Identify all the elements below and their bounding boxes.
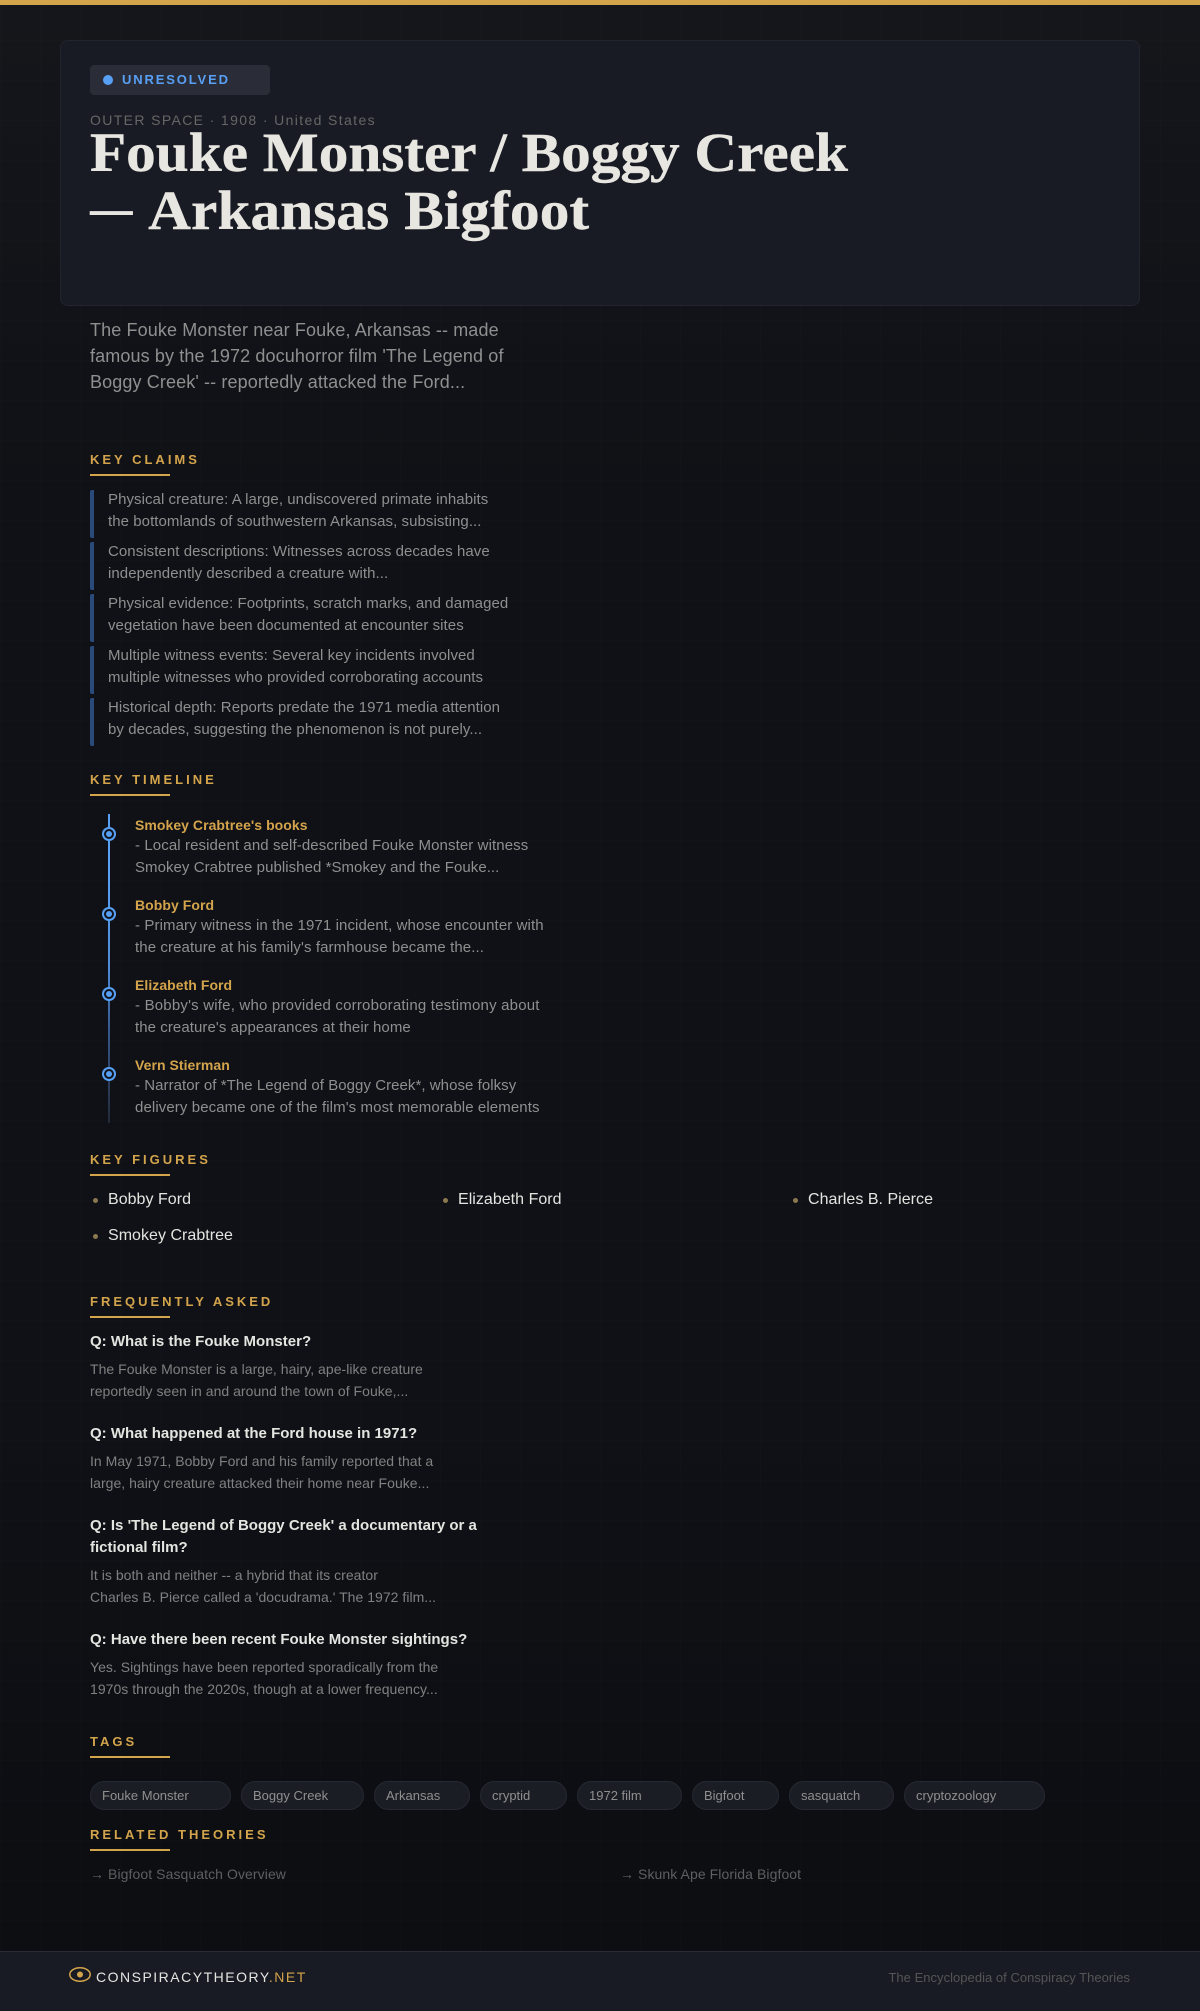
timeline event 2 <box>135 897 544 956</box>
panel: hero header <box>60 40 1140 306</box>
faq answer 1: The Fouke Monster is a large, hairy, ape-like creature <box>90 1361 423 1377</box>
claim 2: independently described a creature with... <box>108 564 388 582</box>
faq answer 2: large, hairy creature attacked their home near Fouke... <box>90 1475 429 1491</box>
figure: Smokey Crabtree: Smokey Crabtree <box>108 1227 233 1244</box>
tag pill: Bigfoot <box>692 1781 779 1810</box>
title: — <box>90 177 133 238</box>
intro summary <box>90 320 504 392</box>
timeline event 1 <box>135 817 528 876</box>
timeline event 3: the creature's appearances at their home <box>135 1019 411 1036</box>
timeline node 4 <box>102 1067 116 1081</box>
timeline spine <box>108 814 110 1123</box>
heading: key timeline: KEY TIMELINE <box>90 772 217 787</box>
faq question 3: fictional film? <box>90 1539 188 1556</box>
figure: Elizabeth Ford: Elizabeth Ford <box>458 1191 562 1208</box>
heading: tags: TAGS <box>90 1734 137 1749</box>
claim 1: the bottomlands of southwestern Arkansas, subsisting... <box>108 512 482 530</box>
claim 2 <box>90 542 550 590</box>
title: Fouke Monster / Boggy Creek <box>90 122 848 183</box>
timeline node 2 <box>102 907 116 921</box>
badge label: UNRESOLVED <box>122 72 230 87</box>
figure: Bobby Ford: Bobby Ford <box>108 1191 191 1208</box>
claim 1 <box>90 490 550 538</box>
claim 3 <box>90 594 550 642</box>
heading: key figures: KEY FIGURES <box>90 1152 211 1167</box>
faq answer 4: Yes. Sightings have been reported sporadically from the <box>90 1659 438 1675</box>
timeline event 3: Elizabeth Ford <box>135 977 232 993</box>
claim 1: Physical creature: A large, undiscovered primate inhabits <box>108 490 488 508</box>
claim 4: Multiple witness events: Several key incidents involved <box>108 646 475 664</box>
claim 3: Physical evidence: Footprints, scratch marks, and damaged <box>108 594 508 612</box>
claim 5 <box>90 698 550 746</box>
tag pill: sasquatch <box>789 1781 894 1810</box>
timeline event 1: Smokey Crabtree's books <box>135 817 308 833</box>
faq question 1: Q: What is the Fouke Monster? <box>90 1333 311 1350</box>
tag pill: Boggy Creek <box>241 1781 364 1810</box>
claim 2: Consistent descriptions: Witnesses across decades have <box>108 542 490 560</box>
icon: eye logo <box>69 1967 91 1982</box>
timeline event 4 <box>135 1057 540 1116</box>
faq question 4: Q: Have there been recent Fouke Monster sightings? <box>90 1631 467 1648</box>
heading: frequently asked: FREQUENTLY ASKED <box>90 1294 273 1309</box>
title <box>90 122 848 242</box>
faq answer 2 <box>90 1453 434 1491</box>
tag pill: cryptid: cryptid <box>492 1788 530 1803</box>
claim 4 <box>90 646 550 694</box>
timeline event 2: Bobby Ford <box>135 897 214 913</box>
timeline event 4: - Narrator of *The Legend of Boggy Creek*, whose folksy <box>135 1077 516 1094</box>
faq answer 4: 1970s through the 2020s, though at a lower frequency... <box>90 1681 438 1697</box>
faq question 2: Q: What happened at the Ford house in 1971? <box>90 1425 417 1442</box>
timeline event 1: - Local resident and self-described Fouke Monster witness <box>135 837 528 854</box>
timeline <box>108 814 110 1123</box>
heading: key claims: KEY CLAIMS <box>90 452 200 467</box>
faq question 3: Q: Is 'The Legend of Boggy Creek' a documentary or a <box>90 1517 477 1534</box>
tag pill: 1972 film <box>577 1781 682 1810</box>
timeline node 3 <box>102 987 116 1001</box>
claim 3: vegetation have been documented at encounter sites <box>108 616 464 634</box>
panel: footer <box>0 1951 1200 2011</box>
intro summary: The Fouke Monster near Fouke, Arkansas -- made <box>90 320 499 340</box>
footer tagline: The Encyclopedia of Conspiracy Theories <box>888 1970 1130 1985</box>
claim 5: by decades, suggesting the phenomenon is not purely... <box>108 720 482 738</box>
tag pill: cryptid <box>480 1781 567 1810</box>
timeline node 1 <box>102 827 116 841</box>
tag pill: Boggy Creek: Boggy Creek <box>253 1788 328 1803</box>
faq answer 1 <box>90 1361 423 1399</box>
faq answer 1: reportedly seen in and around the town of Fouke,... <box>90 1383 408 1399</box>
timeline event 4: Vern Stierman <box>135 1057 230 1073</box>
related link: Bigfoot Sasquatch Overview: → Bigfoot Sasquatch Overview <box>90 1866 286 1882</box>
footer logo text: CONSPIRACYTHEORY.NET <box>96 1969 307 1985</box>
timeline event 1: Smokey Crabtree published *Smokey and the Fouke... <box>135 859 499 876</box>
timeline event 2: - Primary witness in the 1971 incident, whose encounter with <box>135 917 544 934</box>
tag pill: Arkansas <box>374 1781 470 1810</box>
heading: related theories: RELATED THEORIES <box>90 1827 268 1842</box>
figure: Charles B. Pierce: Charles B. Pierce <box>808 1191 933 1208</box>
claim 5: Historical depth: Reports predate the 1971 media attention <box>108 698 500 716</box>
tag pill: cryptozoology: cryptozoology <box>916 1788 996 1803</box>
tag pill: Fouke Monster <box>90 1781 231 1810</box>
faq answer 3: It is both and neither -- a hybrid that its creator <box>90 1567 378 1583</box>
intro summary: Boggy Creek' -- reportedly attacked the Ford... <box>90 372 465 392</box>
faq answer 2: In May 1971, Bobby Ford and his family reported that a <box>90 1453 433 1469</box>
claim 4: multiple witnesses who provided corroborating accounts <box>108 668 483 686</box>
faq question 3 <box>90 1517 477 1556</box>
timeline event 3: - Bobby's wife, who provided corroborating testimony about <box>135 997 540 1014</box>
timeline event 2: the creature at his family's farmhouse became the... <box>135 939 484 956</box>
tag pill: cryptozoology <box>904 1781 1045 1810</box>
tag pill: Bigfoot: Bigfoot <box>704 1788 744 1803</box>
status badge <box>90 65 270 95</box>
intro summary: famous by the 1972 docuhorror film 'The Legend of <box>90 346 504 366</box>
tag pill: Arkansas: Arkansas <box>386 1788 440 1803</box>
title: Arkansas Bigfoot <box>148 180 589 241</box>
top accent bar <box>0 0 1200 5</box>
timeline event 4: delivery became one of the film's most memorable elements <box>135 1099 540 1116</box>
category meta line: OUTER SPACE · 1908 · United States <box>90 112 376 128</box>
tag pill: 1972 film: 1972 film <box>589 1788 642 1803</box>
tag pill: sasquatch: sasquatch <box>801 1788 860 1803</box>
panel: key claims list <box>90 490 508 746</box>
faq answer 3 <box>90 1567 436 1605</box>
faq answer 3: Charles B. Pierce called a 'docudrama.' The 1972 film... <box>90 1589 436 1605</box>
icon: status dot <box>103 75 113 85</box>
related link: Skunk Ape Florida Bigfoot: → Skunk Ape Florida Bigfoot <box>620 1866 801 1882</box>
timeline event 3 <box>135 977 540 1036</box>
tag pill: Fouke Monster: Fouke Monster <box>102 1788 189 1803</box>
faq answer 4 <box>90 1659 438 1697</box>
